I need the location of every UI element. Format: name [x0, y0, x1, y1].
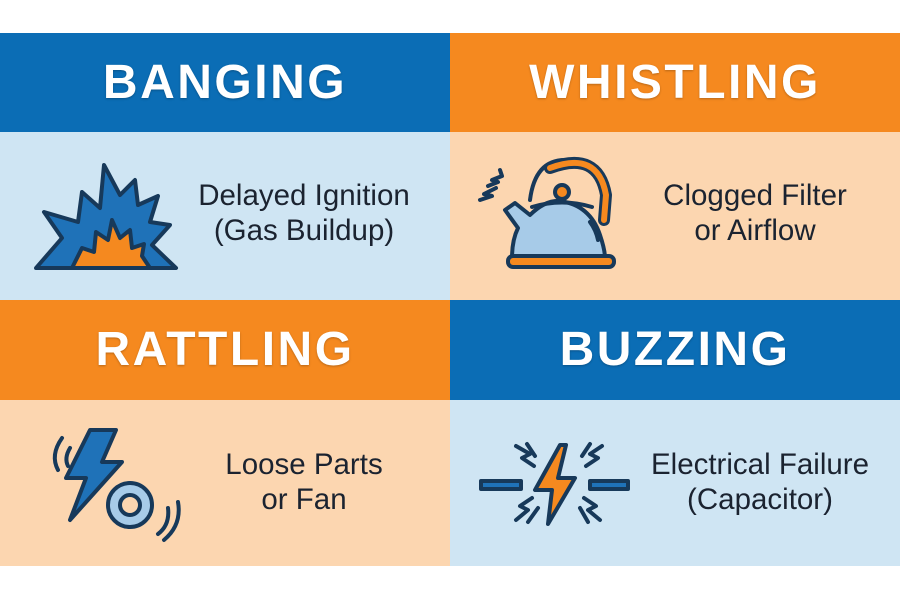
heading: whistling: WHISTLING: [529, 56, 821, 109]
text: loose parts: Loose Parts: [225, 448, 383, 481]
heading: banging: BANGING: [103, 56, 347, 109]
text: loose parts: or Fan: [261, 483, 347, 516]
text: delayed ignition: [198, 179, 410, 247]
text: electrical failure: Electrical Failure: [651, 448, 869, 481]
text: electrical failure: [651, 448, 869, 516]
text: clogged filter: Clogged Filter: [663, 179, 847, 212]
panel: banging: [0, 33, 450, 300]
heading: buzzing: BUZZING: [560, 323, 790, 376]
panel: rattling: [0, 300, 450, 566]
text: clogged filter: [663, 179, 847, 247]
text: loose parts: [225, 448, 383, 516]
panel: buzzing: [450, 300, 900, 566]
heading: buzzing: [450, 300, 900, 400]
text: delayed ignition: (Gas Buildup): [214, 214, 394, 247]
heading: rattling: RATTLING: [95, 323, 355, 376]
text: clogged filter: or Airflow: [694, 214, 816, 247]
text: delayed ignition: Delayed Ignition: [198, 179, 410, 212]
heading: banging: [0, 33, 450, 132]
heading: whistling: [450, 33, 900, 132]
panel: whistling: [450, 33, 900, 300]
heading: rattling: [0, 300, 450, 400]
text: electrical failure: (Capacitor): [687, 483, 833, 516]
